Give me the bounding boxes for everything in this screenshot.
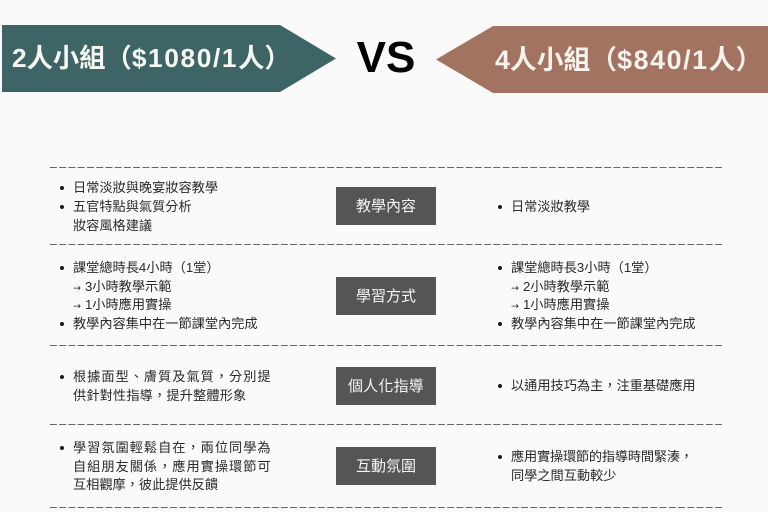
label: personal guidance	[336, 367, 436, 405]
label: personal guidance: 個人化指導	[348, 378, 424, 395]
right text: learning method: 教學內容集中在一節課堂內完成	[511, 316, 696, 331]
VS heading: VS	[357, 33, 415, 82]
label: interaction atmosphere: 互動氛圍	[356, 458, 416, 475]
right text: learning method: 課堂總時長3小時（1堂）	[511, 260, 658, 275]
left text: learning method: 課堂總時長4小時（1堂）	[73, 260, 220, 275]
left text: personal guidance	[60, 369, 272, 403]
left arrow banner: 2-person group	[2, 25, 336, 92]
left text: learning method: → 3小時教學示範	[73, 278, 171, 294]
left text: teaching content	[60, 180, 218, 233]
left text: interaction atmosphere: 互相觀摩，彼此提供反饋	[73, 477, 218, 492]
right text: teaching content: 日常淡妝教學	[511, 199, 590, 214]
right arrow banner: 4-person group	[436, 26, 768, 93]
label: learning method: 學習方式	[356, 288, 416, 305]
left text: interaction atmosphere: 學習氛圍輕鬆自在，兩位同學為	[73, 440, 272, 455]
right text: interaction atmosphere: 同學之間互動較少	[511, 468, 616, 483]
label: teaching content: 教學內容	[356, 198, 416, 215]
left arrow banner: 2-person group: 2人小組（$1080/1人）	[12, 43, 291, 73]
left text: interaction atmosphere	[60, 440, 272, 492]
left text: learning method: 教學內容集中在一節課堂內完成	[73, 316, 258, 331]
right text: learning method: → 2小時教學示範	[511, 278, 609, 294]
right text: learning method: → 1小時應用實操	[511, 297, 609, 312]
left text: personal guidance: 根據面型、膚質及氣質，分別提	[73, 369, 272, 384]
right arrow banner: 4-person group: 4人小組（$840/1人）	[495, 45, 762, 75]
left text: teaching content: 日常淡妝與晚宴妝容教學	[73, 180, 218, 195]
label: learning method	[336, 277, 436, 315]
right text: interaction atmosphere: 應用實操環節的指導時間緊湊，	[511, 449, 693, 464]
left text: teaching content: 妝容風格建議	[73, 218, 152, 233]
left text: personal guidance: 供針對性指導，提升整體形象	[73, 388, 246, 403]
right text: learning method	[498, 260, 696, 331]
label: teaching content	[336, 187, 436, 225]
left text: learning method	[60, 260, 258, 331]
left text: interaction atmosphere: 自組朋友關係，應用實操環節可	[73, 458, 272, 474]
left text: learning method: → 1小時應用實操	[73, 297, 171, 312]
right text: interaction atmosphere	[498, 449, 693, 483]
label: interaction atmosphere	[336, 447, 436, 485]
right text: personal guidance: 以通用技巧為主，注重基礎應用	[511, 378, 696, 393]
left text: teaching content: 五官特點與氣質分析	[73, 199, 192, 214]
